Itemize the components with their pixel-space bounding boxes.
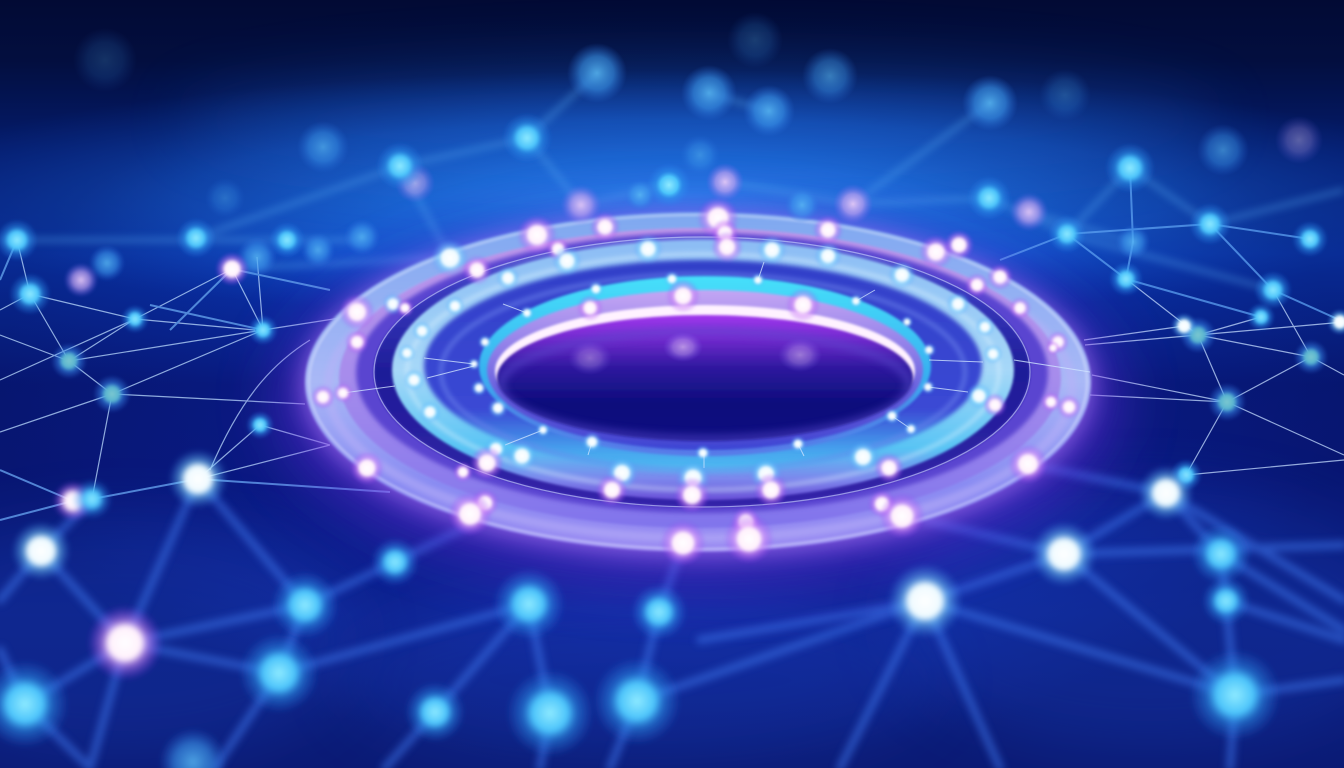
upper and side nodes (0, 113, 1344, 491)
light dots on rings (311, 197, 1081, 566)
network lines: thin left links (0, 240, 390, 520)
ring glow (278, 220, 1118, 580)
thin spokes between rings (343, 262, 1090, 468)
distant blurred nodes (73, 12, 1323, 224)
middle ring (392, 240, 1014, 500)
ring center opening (497, 315, 913, 441)
inner ring and light rim (479, 276, 931, 456)
network lines: far blurred links (0, 73, 1344, 290)
network lines: thin right links (1000, 168, 1344, 475)
outer ring (302, 212, 1094, 557)
network lines: thick foreground links (0, 464, 1344, 768)
foreground nodes (0, 449, 1281, 768)
ring system (302, 197, 1094, 566)
